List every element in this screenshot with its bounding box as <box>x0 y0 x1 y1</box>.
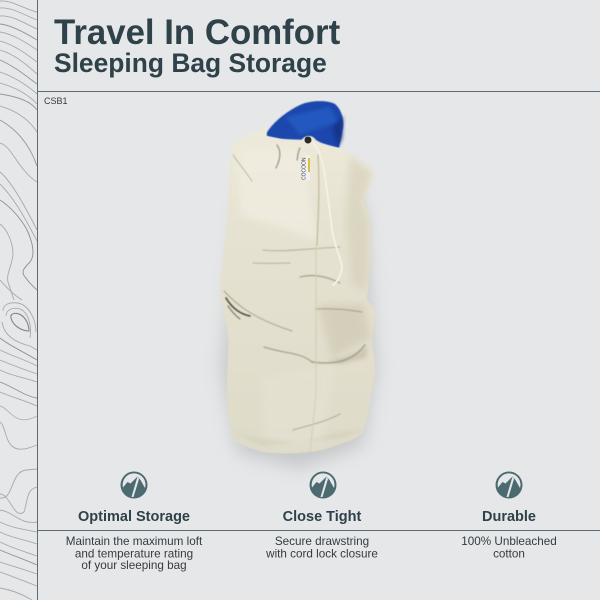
feature: close tight <box>265 472 378 560</box>
product photo: sleeping bag storage sack: COCOON <box>302 157 308 180</box>
heading: Durable <box>482 509 536 525</box>
product code: CSB1 <box>44 96 68 106</box>
heading: Optimal Storage <box>78 509 190 525</box>
title: Travel In Comfort <box>54 13 341 52</box>
description: cotton <box>493 548 525 560</box>
icon: mountain <box>120 472 148 498</box>
drawcord <box>308 137 342 285</box>
topographic contour pattern <box>0 1 37 600</box>
cord lock <box>304 136 312 144</box>
description: with cord lock closure <box>265 548 378 560</box>
product photo: sleeping bag storage sack <box>220 101 376 468</box>
description: of your sleeping bag <box>81 559 187 572</box>
description: 100% Unbleached <box>461 535 557 548</box>
description: Maintain the maximum loft <box>66 535 203 548</box>
icon: mountain <box>310 472 336 498</box>
cloth shading <box>346 156 372 290</box>
blue sleeping bag <box>265 101 343 148</box>
label tag <box>301 155 310 181</box>
description: and temperature rating <box>75 548 193 560</box>
subtitle: Sleeping Bag Storage <box>54 48 327 78</box>
icon: mountain <box>496 472 522 498</box>
creases <box>224 145 365 452</box>
description: Secure drawstring <box>275 535 369 548</box>
feature: optimal storage <box>66 472 203 572</box>
canvas sack <box>220 127 375 454</box>
heading: Close Tight <box>283 509 362 525</box>
feature: durable <box>461 472 557 560</box>
